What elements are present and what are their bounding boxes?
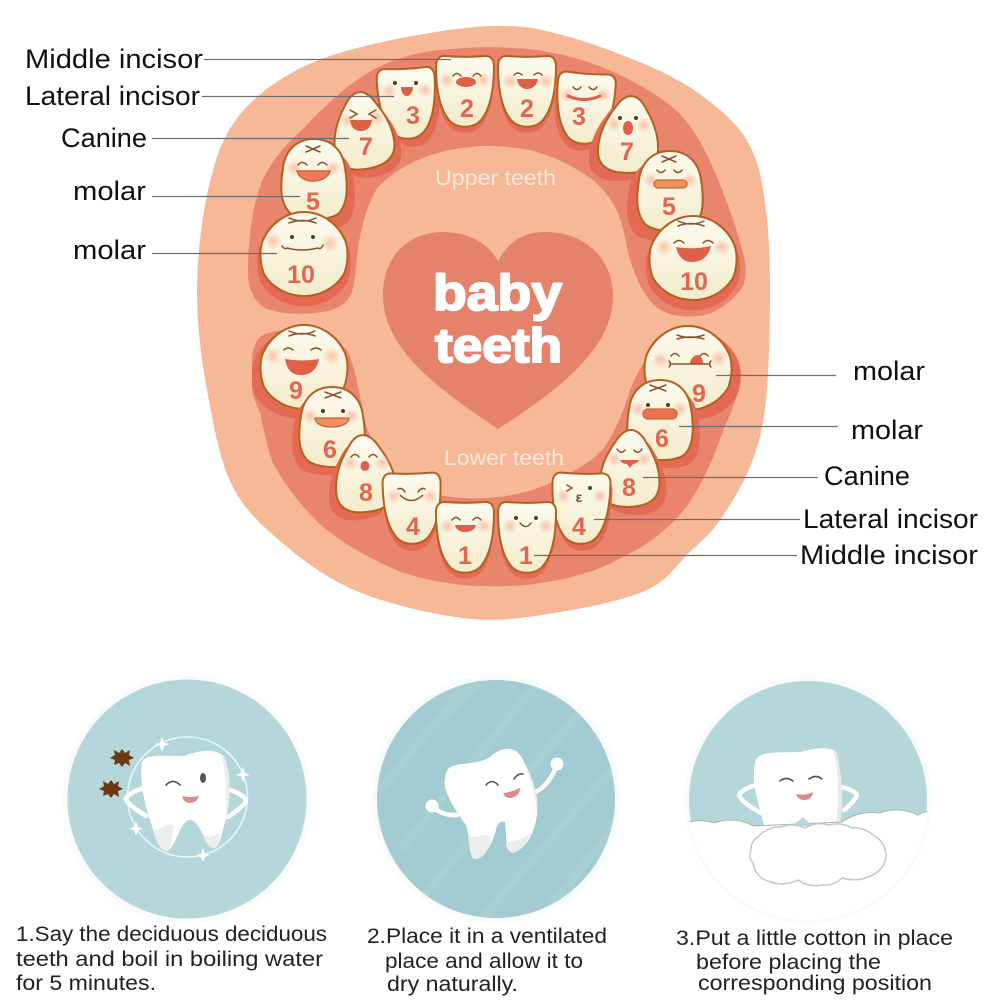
labels: left side: Lateral incisor (25, 81, 200, 111)
upper left tooth 10 (257, 212, 351, 306)
lower left tooth 1 (436, 502, 494, 579)
labels: right side: molar (851, 415, 923, 445)
caption: step 2 (367, 925, 607, 996)
caption: step 3: 3.Put a little cotton in place (676, 927, 953, 950)
upper gum arch (248, 47, 746, 317)
mouth background blob (197, 26, 770, 620)
labels: left side: Middle incisor (25, 44, 203, 74)
labels: right side: Middle incisor (800, 540, 978, 570)
lower left tooth 8 (325, 433, 398, 522)
lower left tooth 1: 1 (458, 542, 472, 570)
lower right tooth 4: ε (576, 489, 583, 505)
labels: left side: molar (73, 176, 146, 206)
upper right tooth 5: 5 (662, 193, 676, 221)
labels: right side: Lateral incisor (803, 504, 978, 534)
lower right tooth 1 (498, 502, 556, 579)
lower right tooth 8: 8 (622, 474, 636, 502)
panel: step 2 illustration (372, 675, 620, 923)
label: lower teeth: Lower teeth (444, 447, 564, 470)
upper right tooth 3 (551, 71, 616, 153)
labels: left side (25, 44, 203, 265)
labels: left side: molar (73, 235, 146, 265)
caption: step 1 (16, 923, 327, 995)
upper right tooth 7: 7 (620, 138, 634, 166)
lower right tooth 6: 6 (655, 425, 669, 453)
caption: step 1: for 5 minutes. (16, 972, 156, 995)
upper left tooth 5: 5 (306, 188, 320, 216)
caption: step 1: 1.Say the deciduous deciduous (16, 923, 327, 946)
labels: right side: Canine (824, 461, 910, 491)
upper right tooth 10 (646, 216, 740, 310)
panel: step 1 illustration (63, 675, 311, 923)
label: upper teeth: Upper teeth (435, 167, 556, 190)
leader lines (152, 60, 838, 556)
upper right tooth 5 (627, 151, 703, 241)
upper left tooth 5 (281, 139, 355, 229)
lower right tooth 4: 4 (572, 513, 586, 541)
upper left tooth 3 (376, 66, 443, 148)
heart: baby teeth: baby (433, 265, 562, 321)
lower left tooth 8: 8 (359, 479, 373, 507)
upper left tooth 7 (329, 89, 404, 180)
upper left tooth 10: 10 (287, 261, 315, 289)
upper right tooth 2: 2 (520, 95, 534, 123)
upper right tooth 2 (498, 56, 556, 133)
caption: step 3 (676, 927, 953, 995)
caption: step 3: corresponding position (698, 972, 932, 995)
lower left tooth 6: 6 (323, 436, 337, 464)
upper left tooth 3: 3 (406, 102, 420, 130)
upper left tooth 2: 2 (460, 95, 474, 123)
caption: step 3: before placing the (696, 951, 881, 974)
lower left tooth 9 (252, 325, 348, 419)
caption: step 2: place and allow it to (385, 950, 583, 973)
panel: step 3 illustration (689, 681, 928, 886)
lower gum arch (252, 331, 739, 586)
lower right tooth 9: 9 (692, 380, 706, 408)
lower left tooth 4: 4 (406, 513, 420, 541)
caption: step 2: dry naturally. (387, 973, 518, 996)
lower left tooth 6 (292, 387, 365, 475)
lower right tooth 4 (551, 472, 613, 551)
caption: step 1: teeth and boil in boiling water (16, 948, 323, 971)
lower right tooth 8 (599, 429, 668, 516)
caption: step 2: 2.Place it in a ventilated (367, 925, 607, 948)
lower right tooth 9 (644, 326, 741, 419)
upper right tooth 10: 10 (680, 268, 708, 296)
lower left tooth 9: 9 (289, 377, 303, 405)
labels: left side: Canine (61, 123, 147, 153)
heart: baby teeth: teeth (435, 320, 562, 373)
labels: right side: molar (853, 356, 925, 386)
lower right tooth 1: 1 (519, 542, 533, 570)
upper left tooth 2 (436, 56, 494, 133)
heart: baby teeth (383, 232, 613, 429)
labels: right side (800, 356, 978, 570)
upper right tooth 7 (587, 94, 662, 183)
upper left tooth 7: 7 (359, 133, 373, 161)
lower left tooth 4 (382, 472, 442, 551)
lower right tooth 6 (627, 380, 700, 468)
upper right tooth 3: 3 (572, 103, 586, 131)
